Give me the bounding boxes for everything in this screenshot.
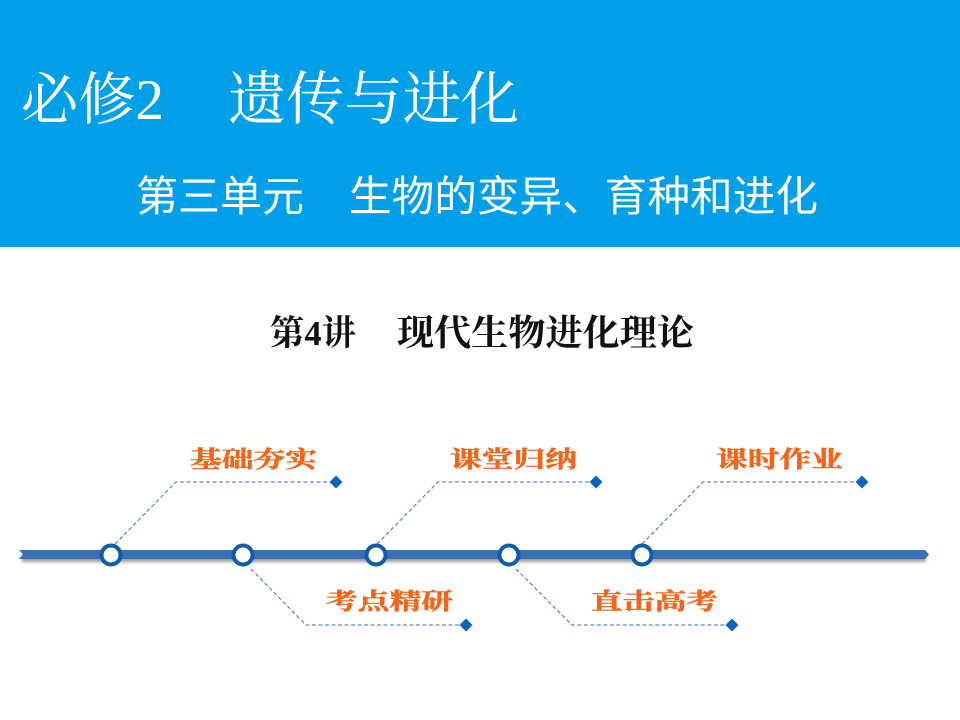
connector: 基础夯实 [115, 482, 336, 544]
node 5 [632, 546, 652, 564]
node 4 [500, 546, 518, 564]
timeline [19, 447, 929, 632]
label: 课堂归纳: 课堂归纳 [450, 447, 577, 472]
connector: 直击高考 [516, 569, 732, 625]
lecture topic: 现代生物进化理论 [397, 313, 694, 353]
diamond 3 [856, 476, 868, 488]
lecture title: 第4讲 [270, 314, 356, 353]
node 2 [234, 546, 252, 564]
node 1 [102, 546, 120, 564]
connector: 考点精研 [251, 569, 466, 625]
header band [0, 0, 960, 247]
diamond 2 [590, 476, 602, 488]
connector: 课堂归纳 [377, 482, 596, 544]
label: 考点精研: 考点精研 [326, 588, 453, 614]
diamond 1 [330, 476, 342, 488]
diamond 5 [726, 618, 738, 632]
unit subtitle topic: 生物的变异、育种和进化 [349, 173, 818, 220]
timeline bar shadow [22, 554, 926, 562]
node 3 [366, 546, 386, 564]
timeline bar [19, 550, 929, 559]
main title subject: 遗传与进化 [228, 67, 519, 132]
label: 课时作业: 课时作业 [716, 447, 843, 472]
label: 基础夯实: 基础夯实 [190, 447, 318, 472]
diamond 4 [460, 618, 472, 632]
unit subtitle: 第三单元 [136, 173, 304, 220]
connector: 课时作业 [642, 482, 862, 544]
main title: 必修2 [21, 69, 164, 132]
label: 直击高考: 直击高考 [591, 589, 718, 614]
